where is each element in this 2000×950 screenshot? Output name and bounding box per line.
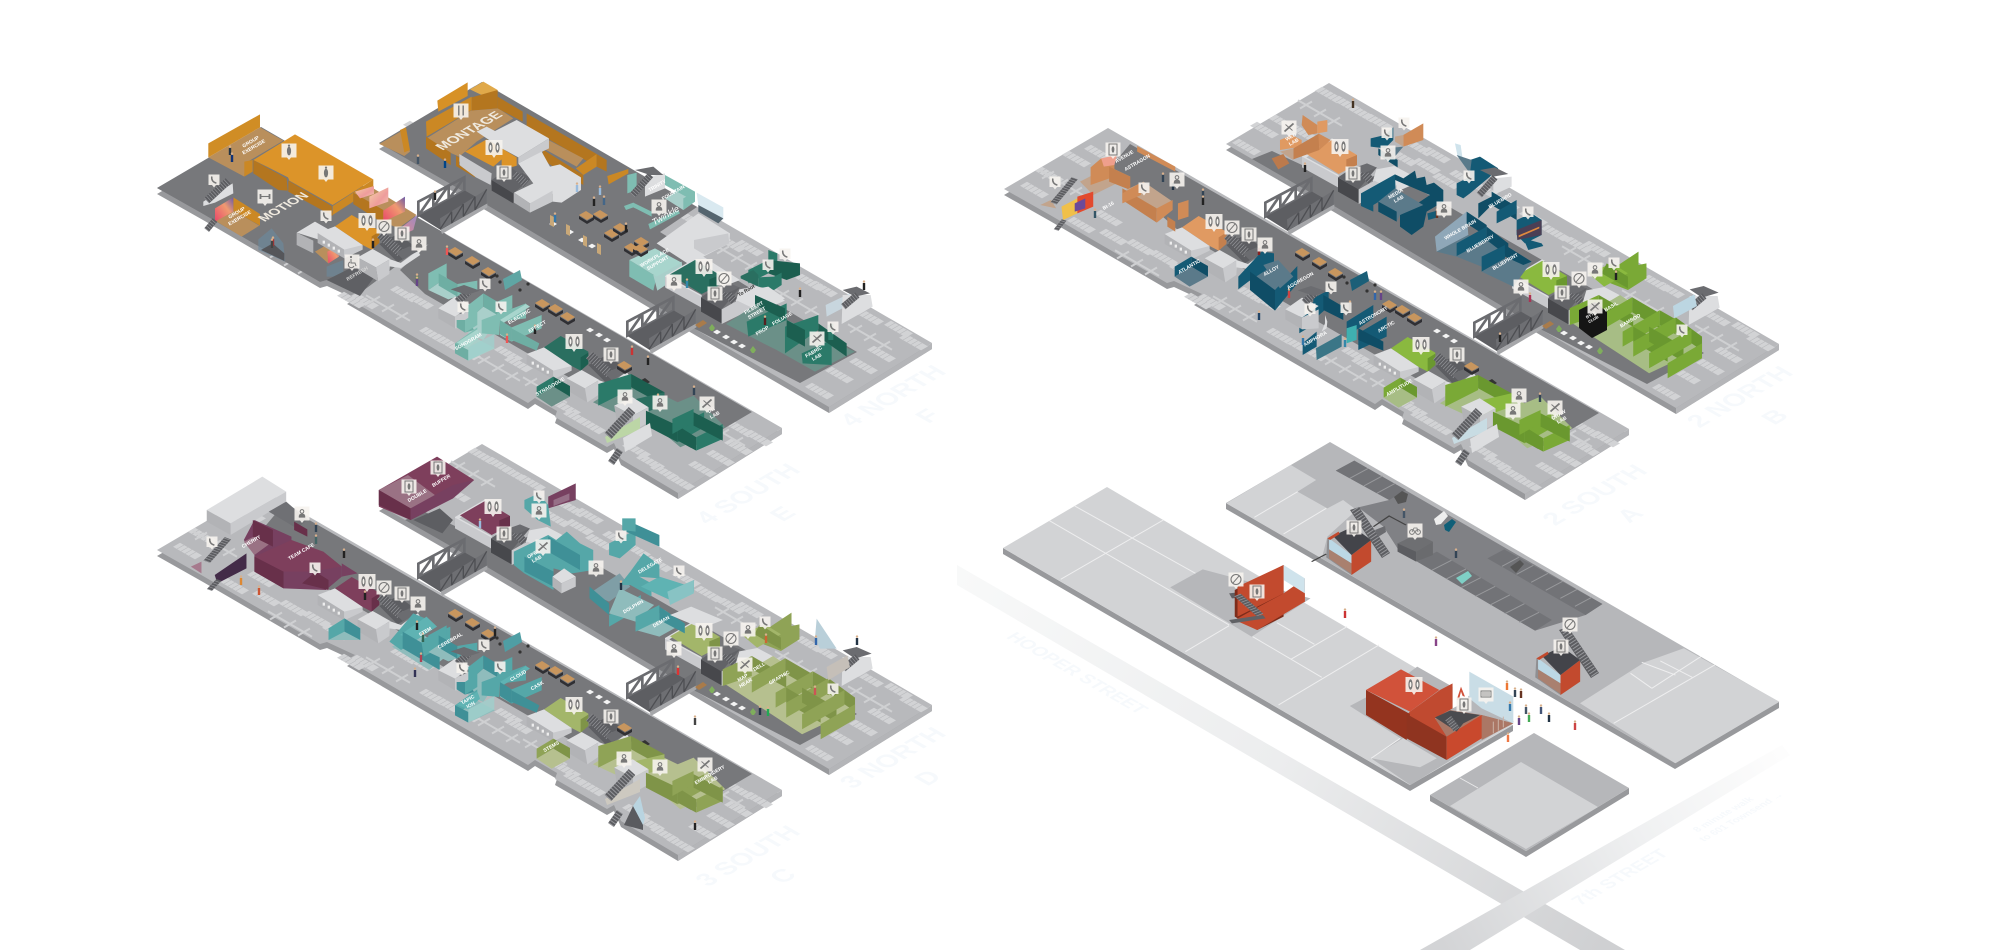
east ground plate (1226, 442, 1779, 769)
room labels level 4: SUPPORT (646, 255, 670, 272)
faint floor labels: 2 SOUTH (1536, 461, 1654, 529)
dark corridor floors level 3 (262, 505, 857, 810)
panel: blue booth stair block (1285, 286, 1327, 329)
room labels level 4: MOTION (254, 190, 312, 223)
room labels level 2: BLUEPRINT (1492, 252, 1519, 272)
room labels level 4: SONOGRAM (454, 332, 483, 352)
panel: teal booths level 3 (428, 625, 542, 723)
room labels level 3 (241, 473, 791, 791)
panel: north core level 3 bridge 1 (455, 499, 575, 565)
panel: peach rooms south wing west (1040, 146, 1189, 232)
panel: teal rooms south wing (329, 613, 450, 670)
room labels level 3: ION (466, 700, 477, 710)
panel: olive grid rooms north wing (723, 613, 855, 739)
room labels level 3: CHERRY (241, 534, 263, 550)
room labels level 4: LAB (811, 352, 823, 363)
faint floor labels: F (909, 405, 947, 427)
panel: stair and glass east end level 3 (815, 619, 873, 686)
room labels level 3: EMBROIDERY (694, 764, 727, 786)
faint floor labels: 3 SOUTH (689, 822, 807, 890)
room labels level 3: BUFFER (431, 473, 452, 489)
panel: mint booths south wing (428, 263, 542, 361)
faint floor labels (689, 362, 1800, 908)
faint floor labels: HOOPER STREET (1002, 630, 1153, 716)
panel: olive booths south end level 3 (593, 736, 725, 813)
panel: Motion gym rooms (203, 114, 417, 296)
faint floor labels: 4 SOUTH (689, 460, 807, 528)
faint floor labels: A (1610, 503, 1650, 527)
bike store (1312, 516, 1433, 562)
faint floor labels: 2 NORTH (1680, 363, 1800, 431)
floor plate: level 3 (157, 444, 932, 861)
people level 2 (1094, 98, 1617, 402)
room labels level 4: To Roof (737, 284, 756, 298)
panel: level 4 north and south wings (157, 82, 873, 463)
faint floor labels: 3 NORTH (833, 724, 953, 792)
panel: south core level 4 bridge 2 (527, 336, 629, 402)
wayfinding icons level 3 (206, 460, 838, 776)
room labels level 2: BLUEBIRD (1488, 192, 1514, 210)
panel: north core level 2 bridge 1 (1302, 138, 1422, 204)
dark corridor floors level 2 (1109, 144, 1704, 449)
panel: furniture south corridor (448, 247, 756, 390)
faint floor labels: 8 minute walk (1691, 795, 1757, 834)
room labels level 3: DELL (752, 661, 767, 673)
room labels level 2: AGGREGON (1286, 271, 1315, 291)
room labels level 3: TAPIC (460, 694, 476, 707)
faint floor labels: 7th STREET (1567, 846, 1673, 908)
room labels level 4: WORKPLACE (639, 247, 671, 269)
room labels level 3: DOUBLE (407, 488, 429, 504)
red lift block 2 (1535, 647, 1580, 695)
room labels level 2: AMPLITUDE (1385, 378, 1414, 398)
room labels level 4: EXERCISE (228, 209, 253, 227)
room labels level 4: REFRESH (346, 265, 370, 283)
room labels level 2: AVENUE (1114, 149, 1135, 165)
room labels level 3: TEAM CAFE (287, 542, 316, 562)
faint floor labels: to 601 Townsend → (1697, 791, 1787, 843)
panel: green booth cluster north (726, 250, 873, 372)
panel: north core level 4 bridge 2 (665, 258, 785, 324)
wayfinding icons level 2 (1050, 118, 1688, 420)
room labels level 4: DIY (707, 405, 718, 415)
room labels level 4: PROP (755, 325, 771, 337)
panel: furniture south corridor level 3 (448, 609, 756, 752)
faint floor labels: E (764, 503, 802, 525)
room labels level 4: MONTAGE (431, 109, 506, 152)
icon group: south core level 4 (318, 215, 420, 281)
room labels level 2: BYTE (1585, 310, 1597, 320)
footbridges level 4 (418, 177, 696, 354)
room labels level 2: ALLOY (1263, 264, 1281, 278)
room labels level 3: LAB (531, 554, 543, 565)
room labels level 2: BASIL (1604, 301, 1619, 313)
room labels level 3: CLOUD (509, 669, 528, 683)
room labels level 3: CASK (530, 680, 545, 692)
room labels level 4: FOLIAGE (771, 311, 794, 327)
garage stair 1 (1350, 507, 1390, 558)
room labels level 3: LAB (707, 775, 719, 786)
panel: store room Synagogue (537, 377, 570, 407)
west ground plate (1003, 487, 1514, 791)
faint floor labels: B (1755, 405, 1795, 429)
panel: teal rooms north wing (514, 493, 723, 637)
room labels level 3: STEM (418, 626, 433, 638)
parked cars (1394, 491, 1524, 584)
room labels level 2: CLUB (1587, 314, 1599, 324)
room labels level 2: BI-16 (1102, 200, 1115, 212)
faint floor labels: D (908, 766, 948, 790)
panel: Montage building (379, 82, 628, 213)
people outside lobby (1344, 508, 1576, 742)
panel: stairs south end level 2 (1452, 411, 1499, 464)
panel: south core level 3 bridge 2 (527, 698, 629, 764)
panel: ground floor plates (1003, 442, 1779, 857)
panel: Atlantic room (1175, 257, 1208, 287)
room labels level 3: GRAPHIC (768, 670, 791, 686)
room labels level 2 (1102, 132, 1642, 427)
red lobby building (1366, 669, 1513, 760)
faint floor labels: 4 NORTH (833, 362, 953, 430)
room labels level 3: CEREBRAL (437, 632, 464, 651)
room labels level 4 (225, 109, 827, 421)
panel: level 2 upper wings (1040, 98, 1720, 464)
wayfinding icons ground floor (1228, 520, 1578, 714)
panel: south core level 2 bridge 1 (1165, 216, 1267, 282)
room labels level 2: ATLANTIC (1177, 258, 1202, 276)
panel: store rooms level 2 (1384, 378, 1417, 408)
red lift block 1 (1326, 527, 1371, 575)
room labels level 2: ASTRONOMY (1358, 305, 1390, 327)
room labels level 2: LAB (1556, 415, 1568, 426)
room labels level 4: GROUP (228, 206, 247, 220)
room labels level 4: GROUP (242, 135, 261, 149)
faint floor labels: C (763, 864, 803, 888)
room labels level 3: MAP (737, 673, 750, 684)
street: Hooper Street road band (957, 565, 1625, 950)
room labels level 4: EXERCISE (242, 138, 267, 156)
panel: blue rooms south wing (1238, 252, 1387, 360)
garage stair 2 (1559, 627, 1599, 678)
red core building west (1229, 565, 1305, 630)
panel: tables in Montage corridor (549, 210, 649, 257)
panel: Double and Buffer rooms (379, 457, 576, 533)
room labels level 3: DEMAN (652, 615, 671, 629)
panel: north wing peach and blue rooms (1272, 115, 1543, 287)
floor plate: level 4 (157, 82, 932, 499)
room labels level 4: ELECTRIC (507, 308, 532, 326)
room labels level 2: MEDIA (1388, 187, 1405, 201)
room labels level 3: OPEN (526, 548, 542, 560)
panel: Cherry and Team Cafe rooms (191, 477, 358, 590)
room labels level 2: BAMBOO (1619, 313, 1642, 329)
panel: lime grid rooms north wing (1570, 252, 1702, 378)
room labels level 3: HEAR (738, 677, 754, 690)
room labels level 2: ASTRAGON (1124, 153, 1152, 173)
room labels level 2: LAB (1288, 137, 1300, 148)
people level 3 (240, 460, 858, 830)
street: 7th Street road band (1420, 745, 1790, 950)
room labels level 4: FABRIC (804, 345, 824, 360)
icon: access stair south end (605, 410, 652, 463)
footbridges level 2 (1265, 178, 1543, 355)
panel: north core level 3 bridge 2 (665, 620, 785, 686)
room labels level 2: WHOLE BRAIN (1443, 218, 1478, 242)
room labels level 2: ARCTIC (1377, 320, 1397, 334)
panel: Trinity and Fountain rooms (624, 167, 740, 291)
black room Byte Club (1579, 302, 1607, 338)
panel: south core level 2 bridge 2 (1374, 337, 1476, 403)
room labels level 4: FILBERT (743, 300, 765, 316)
panel: stairs and glass south end level 3 (605, 772, 645, 830)
room labels level 4: EFFECT (528, 320, 547, 335)
room labels level 2: LAB (1393, 194, 1405, 205)
panel: green booths south end (593, 374, 725, 451)
room labels level 4: FOUNTAIN (661, 184, 686, 202)
panel: south core level 3 bridge 1 (318, 577, 420, 643)
south ground plate (1430, 733, 1629, 857)
room labels level 2: AMPHORA (1303, 330, 1329, 348)
room labels level 3: DOLPHIN (622, 599, 645, 615)
panel: store room level 3 (537, 739, 570, 769)
room labels level 2: BLUEBERRY (1466, 233, 1496, 254)
panel: white end walls level 2 (1673, 286, 1720, 325)
room labels level 4: Twinkle (650, 204, 681, 227)
footbridges level 3 (418, 539, 696, 716)
panel: level 3 north and south wings (191, 457, 873, 830)
people level 4 (229, 145, 865, 403)
panel: lime booths south end level 2 (1440, 375, 1572, 452)
room labels level 3: STEMS (543, 740, 561, 754)
room labels level 3: DELEGATE (637, 556, 664, 575)
wayfinding icons level 4 (208, 104, 838, 413)
panel: north core level 2 bridge 2 (1512, 259, 1632, 325)
room labels level 4: LAB (709, 410, 721, 421)
room labels level 4: SYNAGOGUE (535, 376, 567, 398)
floor plate: level 2 upper (1004, 83, 1779, 500)
dark corridor floors level 4 (157, 82, 857, 448)
room labels level 4: TRINITY (648, 178, 668, 194)
room labels level 2: WEB (1284, 132, 1298, 143)
room labels level 4: STREET (747, 306, 767, 321)
panel: furniture south corridor level 2 (1295, 248, 1603, 391)
room labels level 2: DRAW (1551, 409, 1567, 422)
